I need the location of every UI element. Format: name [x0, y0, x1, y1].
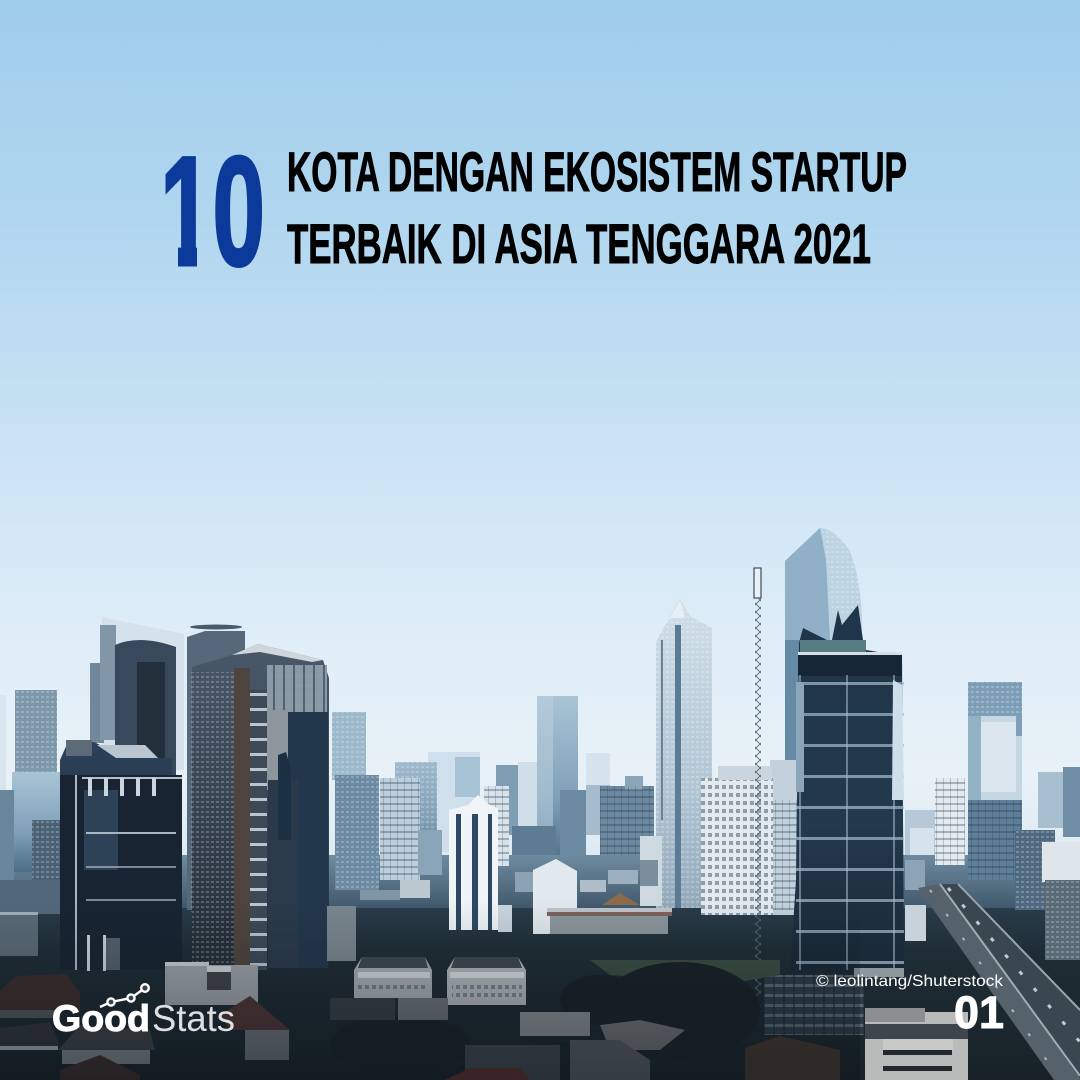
tower: tall concrete [187, 624, 245, 912]
tower: under construction, dark [790, 605, 904, 972]
low buildings right [327, 830, 1080, 961]
distant hazy buildings [0, 695, 1080, 880]
page number: 01 [954, 987, 1004, 1038]
tower crane [754, 568, 761, 996]
podium of the dark tower [764, 968, 904, 1035]
building: small white block [533, 836, 662, 934]
tower: left slim [0, 690, 60, 956]
ground, trees and low city [0, 908, 1080, 1080]
elevated highway [918, 884, 1080, 1080]
park lawn [590, 960, 780, 985]
heading title [287, 140, 907, 275]
heading number 10: 10 [160, 125, 265, 299]
logo: GoodStats [52, 984, 235, 1039]
tower: teal glass block [332, 712, 442, 890]
gray building front right [865, 1008, 968, 1080]
building: white stripe tower [449, 786, 512, 932]
tower: right, half-built [935, 682, 1022, 880]
gray building front left [165, 962, 258, 1005]
tower: glass with dark core [90, 617, 184, 775]
building: colonial low block [547, 893, 672, 934]
logo wordmark bold: Good [52, 998, 150, 1039]
tower: dark office block [60, 740, 182, 971]
building: white apartment block [701, 760, 798, 915]
logo icon: trend line [100, 984, 149, 1007]
houses front [0, 974, 840, 1080]
villas [354, 957, 526, 1005]
logo wordmark light: Stats [152, 998, 235, 1039]
tree masses [330, 962, 760, 1080]
tower: main residential [192, 644, 329, 970]
photo credit: © leolintang/Shuterstock [816, 973, 1004, 990]
tower: light glass with dark strip [656, 598, 712, 908]
darkening at the bottom [0, 900, 860, 1080]
tower: curved glass [785, 528, 862, 760]
mid-distance low-rise band [0, 855, 1080, 915]
